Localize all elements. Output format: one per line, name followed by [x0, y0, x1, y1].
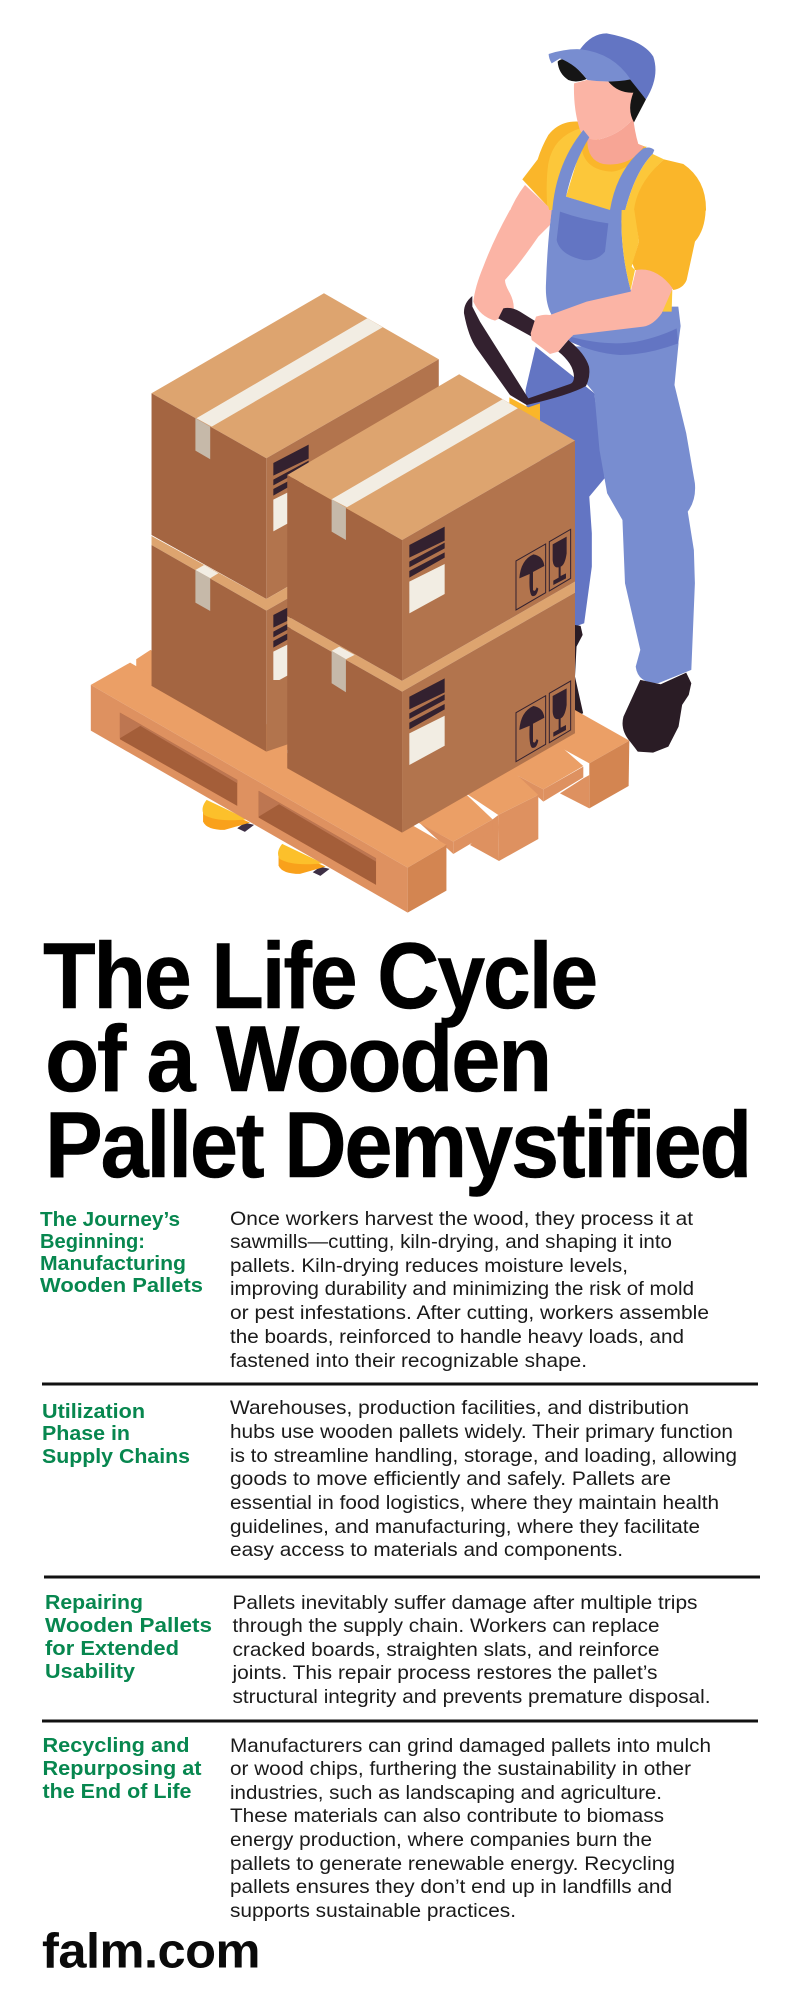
box tape side: [195, 570, 210, 611]
text block: recycling: or wood chips, furthering the sustainability in other: [230, 1758, 692, 1780]
title: The Life Cycle: [43, 923, 596, 1028]
box tape side: [195, 418, 210, 459]
panel: manufacturing: [40, 1208, 709, 1372]
worker: cap brim: [549, 49, 631, 82]
worker: upper body and head: [506, 33, 706, 221]
pallet: right blocks and boards: [413, 710, 629, 861]
heading: repairing: [45, 1592, 212, 1683]
pallet: rear board: [136, 650, 306, 750]
worker: hair: [558, 59, 646, 122]
heading: manufacturing: Wooden Pallets: [40, 1275, 203, 1297]
worker: waist yellow: [662, 290, 672, 312]
heading: utilization: [42, 1401, 190, 1468]
worker: left sleeve highlight: [547, 128, 585, 220]
text block: manufacturing: [230, 1208, 709, 1372]
heading: repairing: Wooden Pallets: [45, 1615, 212, 1637]
text block: repairing: cracked boards, straighten slats, and reinforce: [232, 1639, 660, 1661]
worker: pocket: [557, 212, 608, 260]
heading: utilization: Supply Chains: [42, 1446, 190, 1468]
pallet jack: yellow mast: [509, 397, 540, 430]
box: lower rear: [152, 536, 291, 752]
text block: recycling: industries, such as landscaping and agriculture.: [230, 1782, 662, 1804]
text block: manufacturing: sawmills—cutting, kiln-drying, and shaping it into: [230, 1231, 672, 1253]
text block: recycling: Manufacturers can grind damaged pallets into mulch: [230, 1735, 711, 1757]
text block: repairing: through the supply chain. Workers can replace: [232, 1615, 660, 1637]
worker: face: [574, 80, 633, 140]
box label: lower rear: [273, 608, 291, 680]
icon: keep dry umbrella: [516, 544, 546, 610]
pallet: front beam: [91, 663, 446, 913]
box tape side: [332, 499, 346, 540]
worker: back leg: [526, 347, 605, 627]
text block: utilization: [230, 1397, 737, 1561]
text block: utilization: essential in food logistics, where they maintain health: [230, 1492, 719, 1514]
heading: manufacturing: The Journey’s: [40, 1209, 180, 1231]
text block: repairing: structural integrity and prevents premature disposal.: [232, 1686, 710, 1708]
pallet: cross board 1: [413, 792, 493, 854]
illustration: worker with pallet jack and boxes: [91, 33, 706, 913]
text block: utilization: goods to move efficiently and safely. Pallets are: [230, 1468, 671, 1490]
box label and handling icons: upper front: [409, 527, 571, 613]
worker: left sleeve: [522, 121, 580, 220]
panel: repairing: [45, 1592, 710, 1708]
worker: front leg: [561, 343, 695, 683]
title: [43, 923, 750, 1197]
pallet jack: handle: [464, 296, 589, 405]
box: upper rear: [152, 293, 439, 599]
heading: recycling: [42, 1735, 202, 1803]
text block: utilization: guidelines, and manufacturing, where they facilitate: [230, 1516, 700, 1538]
text block: utilization: is to streamline handling, storage, and loading, allowing: [230, 1445, 737, 1467]
pallet: opening 2: [259, 791, 376, 885]
heading: manufacturing: Manufacturing: [40, 1253, 186, 1275]
worker: left shoulder arm: [506, 185, 552, 221]
box: lower front: [287, 582, 575, 833]
worker: right arm and hand: [531, 270, 673, 354]
worker: right strap highlight: [623, 154, 664, 221]
worker: collar: [582, 138, 645, 172]
text block: manufacturing: Once workers harvest the wood, they process it at: [230, 1208, 694, 1230]
heading: utilization: Phase in: [42, 1423, 130, 1445]
text block: manufacturing: or pest infestations. After cutting, workers assemble: [230, 1302, 709, 1324]
box: upper front: [287, 374, 575, 681]
pallet: opening 1: [120, 713, 237, 806]
text block: repairing: Pallets inevitably suffer damage after multiple trips: [232, 1592, 698, 1614]
box tape: [196, 318, 383, 427]
worker: torso and arms: [464, 210, 706, 430]
pallet: gap fill under boxes: [266, 737, 287, 768]
text block: recycling: [230, 1735, 711, 1922]
title: Pallet Demystified: [45, 1092, 750, 1197]
pallet: far block: [547, 710, 629, 808]
worker: overalls straps: [552, 130, 654, 221]
text block: manufacturing: the boards, reinforced to handle heavy loads, and: [230, 1326, 684, 1348]
pallet jack: wheels: [136, 650, 330, 876]
text block: manufacturing: fastened into their recognizable shape.: [230, 1350, 587, 1372]
worker: front shoe: [623, 673, 691, 753]
worker: neck: [587, 118, 644, 164]
panel: recycling: [42, 1735, 711, 1922]
pallet: cross board 2: [508, 740, 583, 802]
pallet: middle block: [463, 767, 538, 861]
heading: recycling: the End of Life: [42, 1781, 192, 1803]
worker: cap dome: [580, 33, 655, 99]
box tape: [332, 647, 355, 659]
box tape side: [332, 651, 346, 692]
text block: utilization: Warehouses, production facilities, and distribution: [230, 1397, 689, 1419]
box tape: [332, 399, 518, 507]
heading: repairing: Usability: [45, 1661, 136, 1683]
box label and handling icons: lower front: [409, 678, 571, 765]
worker: waist band: [567, 328, 678, 355]
brand: falm.com: falm.com: [42, 1924, 260, 1978]
heading: manufacturing: [40, 1209, 203, 1297]
heading: repairing: Repairing: [45, 1592, 143, 1614]
pallet jack: wheel 2: [278, 844, 330, 876]
icon: keep dry umbrella: [516, 696, 546, 762]
worker: shirt chest: [566, 135, 647, 211]
box label: upper rear: [273, 445, 309, 531]
icon: fragile glass: [549, 681, 571, 743]
text block: recycling: These materials can also contribute to biomass: [230, 1805, 664, 1827]
pallet: front beam and shoe: [91, 663, 691, 913]
text block: utilization: hubs use wooden pallets widely. Their primary function: [230, 1421, 733, 1443]
heading: recycling: Recycling and: [42, 1735, 190, 1757]
text block: recycling: supports sustainable practices.: [230, 1900, 516, 1922]
heading: repairing: for Extended: [45, 1638, 179, 1660]
worker: legs: [526, 343, 695, 717]
heading: manufacturing: Beginning:: [40, 1231, 145, 1253]
text block: repairing: [231, 1592, 710, 1708]
text block: recycling: energy production, where companies burn the: [230, 1829, 652, 1851]
worker: back shoe: [575, 625, 583, 717]
text block: manufacturing: improving durability and minimizing the risk of mold: [230, 1278, 694, 1300]
worker: shirt side: [621, 210, 639, 290]
worker: overalls torso: [546, 210, 681, 355]
heading: recycling: Repurposing at: [42, 1758, 202, 1780]
text block: manufacturing: pallets. Kiln-drying reduces moisture levels,: [230, 1255, 628, 1277]
worker: right sleeve lower: [632, 210, 706, 290]
panel: utilization: [42, 1397, 737, 1561]
title: of a Wooden: [45, 1006, 550, 1111]
heading: utilization: Utilization: [42, 1401, 145, 1423]
text block: recycling: pallets to generate renewable energy. Recycling: [230, 1853, 675, 1875]
text block: utilization: easy access to materials and components.: [230, 1539, 623, 1561]
icon: fragile glass: [549, 529, 571, 591]
worker: right sleeve top: [634, 159, 706, 211]
text block: repairing: joints. This repair process restores the pallet’s: [231, 1662, 658, 1684]
pallet jack: wheel 1: [203, 800, 254, 832]
worker: left forearm: [473, 210, 552, 321]
text block: recycling: pallets ensures they don’t end up in landfills and: [230, 1876, 672, 1898]
box tape: [195, 565, 218, 578]
